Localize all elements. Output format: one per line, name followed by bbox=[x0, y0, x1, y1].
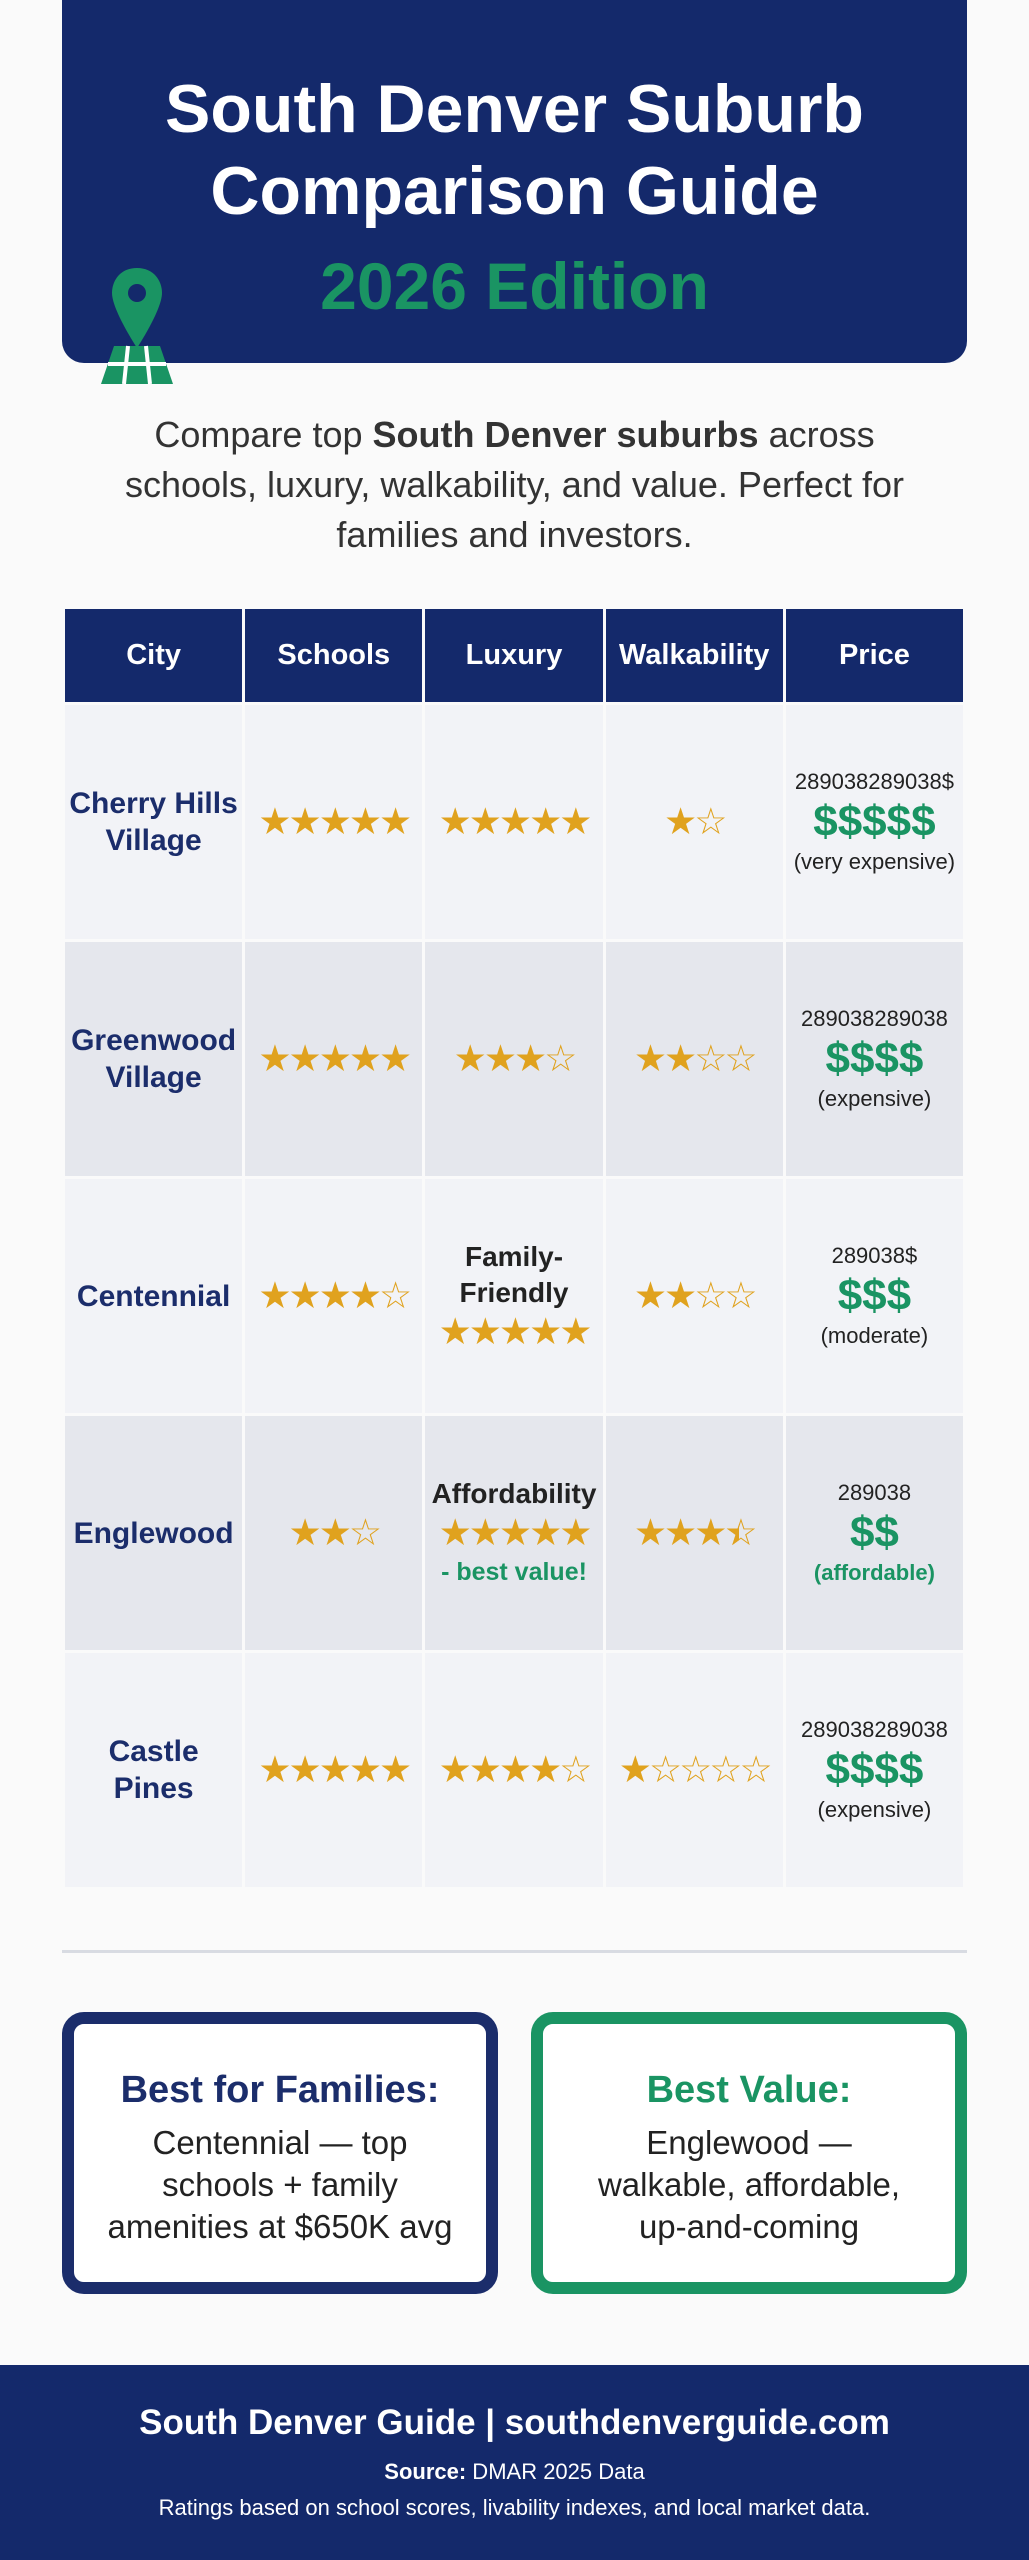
callout: best value: Best Value: bbox=[647, 2069, 851, 2111]
intro text: Compare top South Denver suburbs across schools, luxury, walkability, and value. Perfect for families and investors. bbox=[125, 414, 904, 555]
row: Centennial: ★★★★☆ bbox=[258, 1275, 409, 1316]
row: Cherry Hills Village: ★★★★★ bbox=[258, 801, 409, 842]
row: Englewood: ★★☆ bbox=[289, 1512, 379, 1553]
row: Castle Pines: ★★★★★ bbox=[258, 1749, 409, 1790]
row: Centennial: 289038$ bbox=[832, 1243, 917, 1268]
title: Comparison Guide bbox=[210, 153, 819, 229]
row: Centennial: Centennial bbox=[77, 1280, 230, 1312]
table header bbox=[65, 609, 963, 702]
row: Cherry Hills Village: ★★★★★ bbox=[439, 801, 589, 842]
row: Cherry Hills Village: (very expensive) bbox=[794, 849, 955, 874]
callout: best for families: schools + family bbox=[162, 2166, 398, 2203]
header banner bbox=[62, 0, 967, 363]
row: Greenwood Village: Village bbox=[106, 1061, 202, 1094]
callout: best value bbox=[531, 2012, 967, 2294]
row: Greenwood Village bbox=[65, 939, 963, 1176]
row: Greenwood Village: Greenwood bbox=[71, 1024, 236, 1057]
row: Castle Pines: 289038289038 bbox=[801, 1717, 948, 1742]
row: Englewood: ★★★ bbox=[634, 1512, 724, 1553]
callout: best value: Englewood — bbox=[646, 2124, 852, 2161]
row: Castle Pines: (expensive) bbox=[818, 1797, 931, 1822]
row: Castle Pines: $$$$ bbox=[825, 1745, 923, 1794]
row: Centennial: ★★★★★ bbox=[439, 1311, 589, 1352]
row: Englewood: (affordable) bbox=[814, 1560, 935, 1585]
row: Cherry Hills Village: ★☆ bbox=[664, 801, 724, 842]
footer: South Denver Guide | southdenverguide.com bbox=[139, 2403, 890, 2442]
row: Castle Pines: ★☆☆☆☆ bbox=[619, 1749, 770, 1790]
row: Cherry Hills Village: $$$$$ bbox=[813, 797, 936, 846]
row: Englewood: 289038 bbox=[838, 1480, 911, 1505]
icon: map pin bbox=[101, 268, 173, 384]
footer bbox=[0, 2365, 1029, 2560]
callout: best value: walkable, affordable, bbox=[598, 2166, 900, 2203]
callout: best for families: amenities at $650K avg bbox=[108, 2208, 452, 2245]
row: Castle Pines bbox=[65, 1650, 963, 1887]
title bbox=[165, 71, 864, 229]
row: Englewood bbox=[65, 1413, 963, 1650]
callout: best for families: Best for Families: bbox=[121, 2069, 439, 2111]
row: Englewood: ★★★★★ bbox=[439, 1512, 589, 1553]
edition subtitle: 2026 Edition bbox=[320, 249, 709, 323]
row: Cherry Hills Village: Cherry Hills bbox=[69, 787, 238, 820]
row: Greenwood Village: ★★★★★ bbox=[258, 1038, 409, 1079]
table header: Luxury bbox=[466, 639, 562, 671]
table header: Schools bbox=[277, 639, 390, 671]
row: Castle Pines: Castle bbox=[109, 1735, 199, 1768]
title: South Denver Suburb bbox=[165, 71, 864, 147]
row: Centennial bbox=[65, 1176, 963, 1413]
row: Greenwood Village: 289038289038 bbox=[801, 1006, 948, 1031]
footer: Source: DMAR 2025 Data bbox=[384, 2459, 645, 2484]
row: Centennial: Friendly bbox=[460, 1277, 568, 1308]
footer: Ratings based on school scores, livability indexes, and local market data. bbox=[159, 2495, 870, 2520]
row: Englewood: ☆ bbox=[724, 1512, 755, 1553]
row: Englewood: Englewood bbox=[74, 1516, 234, 1550]
row: Centennial: ★★☆☆ bbox=[634, 1275, 755, 1316]
row: Greenwood Village: $$$$ bbox=[825, 1034, 923, 1083]
table header: Walkability bbox=[619, 639, 769, 671]
row: Centennial: (moderate) bbox=[821, 1323, 928, 1348]
table header: Price bbox=[839, 639, 910, 671]
comparison table bbox=[65, 609, 963, 1822]
callout: best for families bbox=[62, 2012, 498, 2294]
callout: best value: up-and-coming bbox=[639, 2208, 859, 2245]
row: Greenwood Village: ★★★☆ bbox=[454, 1038, 574, 1079]
row: Greenwood Village: (expensive) bbox=[818, 1086, 931, 1111]
row: Centennial: $$$ bbox=[838, 1271, 911, 1320]
row: Greenwood Village: ★★☆☆ bbox=[634, 1038, 755, 1079]
row: Cherry Hills Village: 289038289038$ bbox=[795, 769, 954, 794]
callout: best for families: Centennial — top bbox=[152, 2124, 408, 2161]
row: Castle Pines: Pines bbox=[114, 1772, 194, 1805]
row: Englewood: - best value! bbox=[441, 1558, 587, 1586]
row: Cherry Hills Village bbox=[65, 702, 963, 939]
row: Castle Pines: ★★★★☆ bbox=[439, 1749, 589, 1790]
row: Englewood: Affordability bbox=[432, 1478, 596, 1509]
row: Centennial: Family- bbox=[465, 1241, 563, 1272]
row: Englewood: $$ bbox=[850, 1508, 899, 1557]
table header: City bbox=[126, 639, 181, 671]
row: Cherry Hills Village: Village bbox=[106, 824, 202, 857]
